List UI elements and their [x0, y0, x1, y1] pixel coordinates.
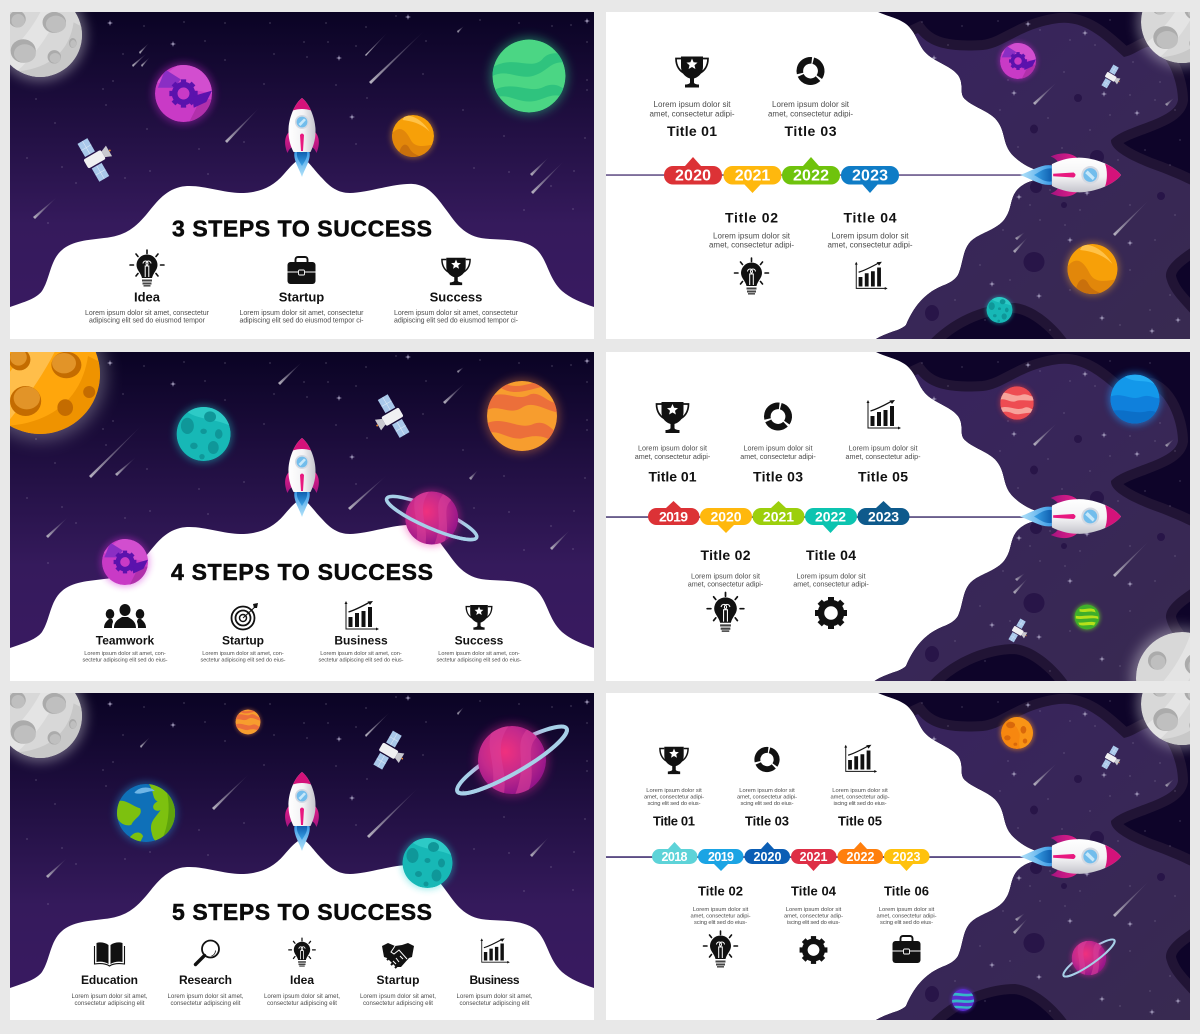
meteors — [1013, 423, 1174, 594]
title: Title 06 — [884, 884, 929, 898]
icon: chart — [844, 745, 877, 773]
step: Education — [72, 942, 148, 1007]
title: Title 05 — [858, 468, 908, 484]
description: Lorem ipsum dolor sit — [693, 907, 749, 913]
title: 4 STEPS TO SUCCESS — [171, 559, 433, 585]
planet: ringed pink — [451, 717, 573, 803]
planet: grey moon — [0, 0, 86, 81]
year marker 2020 — [700, 508, 752, 533]
planet: teal — [175, 405, 232, 463]
year marker 2019: 2019 — [708, 850, 734, 864]
icon: trophy — [466, 605, 492, 630]
icon: target — [232, 603, 258, 630]
description: amet, consectetur adipi- — [768, 110, 853, 118]
step: Idea — [264, 938, 340, 1007]
title: Title 02 — [725, 210, 778, 226]
step: Startup — [240, 257, 364, 324]
space area — [876, 12, 1190, 339]
title: Title 05 — [838, 814, 882, 828]
cloud shape — [10, 499, 594, 691]
description — [82, 651, 168, 664]
description: Lorem ipsum dolor sit amet, — [456, 993, 533, 1000]
planet: purple striped — [951, 988, 975, 1012]
description: Lorem ipsum dolor sit amet, consectetur — [85, 310, 210, 317]
label: Startup — [222, 634, 264, 648]
title: Title 01 — [667, 123, 717, 139]
planet: grey moon — [1130, 12, 1190, 74]
description — [876, 907, 937, 926]
planet: teal — [401, 836, 454, 890]
label: Business — [470, 973, 520, 987]
description: iscing elit sed do eius- — [834, 801, 887, 807]
description — [264, 993, 340, 1007]
description — [690, 907, 751, 926]
description: scing elit sed do eius- — [740, 801, 794, 807]
year marker 2021: 2021 — [763, 508, 794, 524]
description — [709, 232, 794, 250]
description — [168, 993, 244, 1007]
description: consectetur adipiscing elit — [170, 1000, 241, 1007]
year marker 2018: 2018 — [662, 850, 688, 864]
description — [240, 310, 364, 324]
planet: red striped — [999, 385, 1035, 421]
item: Title 04 — [784, 884, 843, 964]
description: Lorem ipsum dolor sit amet, — [360, 993, 436, 1000]
description — [85, 310, 210, 324]
icon: light bulb — [707, 592, 744, 632]
description — [200, 651, 286, 664]
title: Title 02 — [698, 884, 743, 898]
icon: briefcase — [892, 936, 920, 963]
satellite — [78, 138, 112, 182]
item: Title 03 — [737, 748, 797, 828]
panel: 3 steps to success — [0, 0, 594, 350]
title: Title 03 — [784, 123, 837, 139]
night sky — [10, 693, 594, 1020]
description: consectetur adipiscing elit — [363, 1000, 433, 1007]
label: Idea — [134, 290, 161, 304]
description: Lorem ipsum dolor sit amet, con- — [202, 651, 284, 657]
year marker 2018 — [652, 842, 698, 864]
icon: light bulb — [289, 938, 315, 967]
title: Title 04 — [844, 210, 897, 226]
icon: light bulb — [734, 258, 768, 295]
description: Lorem ipsum dolor sit amet, — [264, 993, 340, 1000]
white background — [606, 352, 1190, 681]
year marker 2023 — [884, 849, 930, 871]
icon: cycle — [797, 58, 824, 84]
year marker 2020: 2020 — [675, 168, 711, 185]
icon: gear — [815, 597, 847, 629]
year marker 2023: 2023 — [852, 168, 888, 185]
icon: gear — [800, 936, 827, 964]
description — [793, 572, 869, 588]
timeline line — [606, 174, 1026, 176]
label: Teamwork — [96, 634, 155, 648]
description — [737, 788, 797, 807]
planet: blue — [1109, 373, 1161, 425]
description: sectetur adipiscing elit sed do eius- — [200, 658, 286, 664]
description: amet, consectetur adipi- — [635, 452, 711, 461]
description: scing elit sed do eius- — [694, 920, 747, 926]
icon: open book — [94, 942, 124, 966]
label: Idea — [290, 973, 314, 987]
icon: trophy — [676, 56, 708, 88]
item: Title 01 — [644, 747, 704, 828]
year marker 2020: 2020 — [710, 508, 742, 524]
description — [436, 651, 522, 664]
description: Lorem ipsum dolor sit amet, — [72, 993, 148, 1000]
planet: grey moon — [1137, 659, 1200, 749]
step: Research — [168, 940, 244, 1007]
title: 5 STEPS TO SUCCESS — [172, 899, 432, 925]
item: Title 03 — [740, 403, 816, 484]
icon: handshake — [382, 943, 414, 968]
description: scing elit sed do eius- — [880, 920, 933, 926]
rocket — [1020, 153, 1121, 197]
description: Lorem ipsum dolor sit — [848, 444, 918, 452]
icon: trophy — [660, 747, 688, 774]
planet: orange moon — [0, 308, 106, 440]
icon: cycle — [755, 748, 779, 771]
description — [784, 907, 843, 926]
description: Lorem ipsum dolor sit amet, con- — [438, 651, 520, 657]
title: 3 STEPS TO SUCCESS — [172, 216, 432, 242]
label: Success — [455, 634, 504, 648]
panel: timeline 2020 to 2023 — [606, 0, 1200, 352]
description: Lorem ipsum dolor sit — [832, 232, 909, 240]
planet: orange striped — [485, 379, 559, 453]
satellite — [1100, 745, 1126, 773]
rocket — [285, 772, 319, 851]
title: Title 04 — [806, 547, 856, 563]
description: iscing elit sed do eius- — [787, 920, 840, 926]
satellite — [371, 729, 413, 776]
step: Success — [394, 258, 519, 324]
description: Lorem ipsum dolor sit amet, — [168, 993, 244, 1000]
year marker 2021 — [791, 849, 836, 871]
description: amet, consectetur adipi- — [650, 110, 735, 118]
year marker 2023 — [858, 501, 910, 525]
step: Teamwork — [82, 604, 168, 664]
label: Startup — [376, 973, 420, 987]
description: Lorem ipsum dolor sit — [654, 100, 731, 109]
description: Lorem ipsum dolor sit — [744, 444, 812, 452]
description: Lorem ipsum dolor sit amet, consectetur — [394, 310, 519, 317]
description: adipiscing elit sed do eiusmod tempor — [89, 318, 206, 324]
item: Title 04 — [828, 210, 913, 290]
rocket — [1020, 495, 1121, 538]
label: Business — [334, 634, 388, 648]
panel: 4 steps to success — [0, 308, 594, 691]
rocket — [285, 438, 319, 517]
planet: grey moon — [0, 670, 86, 762]
timeline line — [606, 516, 1026, 518]
space area — [860, 681, 1200, 1033]
icon: cycle — [765, 403, 791, 430]
white background — [606, 12, 1034, 339]
year marker 2021 — [752, 501, 804, 525]
planet: earth — [115, 782, 177, 844]
panel: 5 steps to success — [0, 670, 594, 1031]
description — [456, 993, 533, 1007]
rocket — [285, 98, 319, 177]
title: Title 03 — [745, 814, 789, 828]
description: Lorem ipsum dolor sit — [832, 788, 888, 794]
item: Title 06 — [876, 884, 937, 963]
description: Lorem ipsum dolor sit — [638, 444, 707, 452]
panel: timeline 2018 to 2023 — [606, 659, 1200, 1033]
description: adipiscing elit sed do eiusmod tempor ci- — [240, 318, 364, 324]
year marker 2019: 2019 — [659, 508, 688, 524]
icon: trophy — [656, 402, 688, 433]
description: Lorem ipsum dolor sit amet, con- — [320, 651, 402, 657]
planet: lime — [1074, 604, 1100, 630]
description — [360, 993, 436, 1007]
year marker 2022 — [805, 508, 857, 533]
description: scing elit sed do eius- — [648, 801, 701, 807]
year marker 2023: 2023 — [892, 850, 921, 864]
description — [394, 310, 519, 324]
meteors — [33, 26, 564, 219]
description — [318, 651, 404, 664]
item: Title 03 — [768, 58, 853, 139]
description: amet, consectetur adip- — [830, 794, 890, 800]
description: Lorem ipsum dolor sit amet, con- — [84, 651, 166, 657]
planet: green — [490, 37, 568, 115]
step: Success — [436, 605, 522, 664]
meteors — [1013, 82, 1174, 253]
label: Success — [430, 290, 482, 304]
description — [650, 100, 735, 118]
step: Startup — [360, 943, 436, 1007]
description: amet, consectetur adipi- — [690, 914, 751, 920]
description — [740, 444, 816, 461]
description: amet, consectetur adipi- — [737, 794, 797, 800]
white background — [606, 693, 1190, 1020]
icon: magnifier — [196, 940, 219, 964]
description — [828, 232, 913, 250]
icon: light bulb — [130, 250, 164, 287]
icon: chart — [344, 601, 379, 630]
step: Business — [318, 601, 404, 664]
item: Title 02 — [709, 210, 794, 295]
description: sectetur adipiscing elit sed do eius- — [436, 658, 522, 664]
label: Education — [81, 973, 138, 987]
icon: trophy — [442, 258, 470, 285]
description: Lorem ipsum dolor sit — [786, 907, 842, 913]
item: Title 01 — [650, 56, 735, 139]
planet: magenta — [999, 42, 1037, 80]
year marker 2022: 2022 — [846, 850, 875, 864]
star field — [27, 354, 590, 563]
label: Research — [179, 973, 232, 987]
description: amet, consectetur adipi- — [876, 914, 937, 920]
description: Lorem ipsum dolor sit — [796, 572, 866, 580]
planet: magenta gear planet — [153, 63, 214, 124]
year marker 2020 — [664, 157, 722, 185]
planet: orange lava — [1000, 716, 1034, 750]
description: amet, consectetur adipi- — [793, 580, 869, 588]
panel: timeline 2019 to 2023 — [606, 341, 1200, 729]
icon: briefcase — [288, 257, 316, 284]
year marker 2020 — [744, 842, 790, 864]
description: Lorem ipsum dolor sit — [739, 788, 795, 794]
icon: light bulb — [704, 931, 738, 968]
title: Title 02 — [700, 547, 751, 563]
planet: magenta gear planet — [100, 537, 150, 587]
description: adipiscing elit sed do eiusmod tempor ci- — [394, 318, 519, 324]
title: Title 01 — [648, 468, 697, 484]
year marker 2021 — [724, 166, 782, 193]
planet: teal — [986, 296, 1013, 324]
description — [635, 444, 711, 461]
step: Business — [456, 938, 533, 1007]
year marker 2019 — [648, 501, 700, 525]
satellite — [1102, 64, 1120, 88]
night sky — [10, 352, 594, 681]
meteors — [46, 362, 570, 550]
description: amet, consectetur adipi- — [709, 240, 794, 250]
icon: chart — [866, 400, 901, 430]
description — [846, 444, 921, 461]
item: Title 02 — [688, 547, 764, 632]
step: Startup — [200, 603, 286, 664]
year marker 2022: 2022 — [815, 508, 846, 524]
step: Idea — [85, 250, 210, 324]
year marker 2023: 2023 — [868, 508, 899, 524]
satellite — [1007, 618, 1033, 646]
item: Title 01 — [635, 402, 711, 484]
description: amet, consectetur adipi- — [644, 794, 704, 800]
planet: orange — [391, 114, 435, 158]
description — [768, 100, 853, 118]
description: Lorem ipsum dolor sit — [713, 232, 791, 240]
meteors — [46, 707, 549, 878]
description: consectetur adipiscing elit — [74, 1000, 145, 1007]
planet: orange — [1066, 242, 1119, 296]
timeline line — [606, 856, 1026, 858]
icon: chart — [855, 262, 888, 290]
year marker 2020: 2020 — [754, 850, 782, 864]
meteors — [1013, 763, 1174, 934]
item: Title 02 — [690, 884, 751, 968]
item: Title 04 — [793, 547, 869, 629]
description — [688, 572, 764, 588]
label: Startup — [279, 290, 324, 304]
cloud shape — [10, 158, 594, 350]
planet: ringed pink — [1060, 935, 1118, 981]
description: sectetur adipiscing elit sed do eius- — [318, 658, 404, 664]
description: Lorem ipsum dolor sit — [879, 907, 935, 913]
description: Lorem ipsum dolor sit amet, consectetur — [240, 310, 364, 317]
description: sectetur adipiscing elit sed do eius- — [82, 658, 168, 664]
description: Lorem ipsum dolor sit — [691, 572, 760, 580]
rocket — [1020, 835, 1121, 878]
description: amet, consectetur adip- — [784, 914, 843, 920]
item: Title 05 — [830, 745, 890, 828]
planet: grey moon — [1131, 627, 1200, 729]
title: Title 04 — [791, 884, 837, 898]
title: Title 01 — [653, 814, 695, 828]
description — [830, 788, 890, 807]
description: amet, consectetur adipi- — [740, 452, 816, 461]
description — [644, 788, 704, 807]
year marker 2021: 2021 — [735, 168, 770, 185]
title: Title 03 — [753, 468, 803, 484]
planet: ringed pink — [383, 489, 481, 547]
description: amet, consectetur adipi- — [828, 240, 913, 250]
icon: people — [104, 604, 146, 628]
night sky — [10, 12, 594, 339]
icon: chart — [480, 938, 510, 963]
satellite — [365, 393, 412, 445]
item: Title 05 — [846, 400, 921, 484]
year marker 2021: 2021 — [800, 850, 827, 864]
star field — [27, 14, 590, 223]
space area — [860, 341, 1200, 693]
description: amet, consectetur adipi- — [688, 580, 764, 588]
description: Lorem ipsum dolor sit — [646, 788, 702, 794]
description: amet, consectetur adip- — [846, 452, 921, 461]
year marker 2019 — [698, 849, 744, 871]
year marker 2022 — [838, 842, 883, 864]
description: Lorem ipsum dolor sit — [772, 100, 850, 109]
year marker 2023 — [841, 166, 899, 193]
cloud shape — [10, 839, 594, 1031]
description — [72, 993, 148, 1007]
description: consectetur adipiscing elit — [267, 1000, 337, 1007]
description: consectetur adipiscing elit — [460, 1000, 530, 1007]
planet: small orange striped — [235, 709, 261, 735]
star field — [27, 695, 590, 904]
year marker 2022 — [782, 157, 840, 185]
year marker 2022: 2022 — [793, 168, 829, 185]
